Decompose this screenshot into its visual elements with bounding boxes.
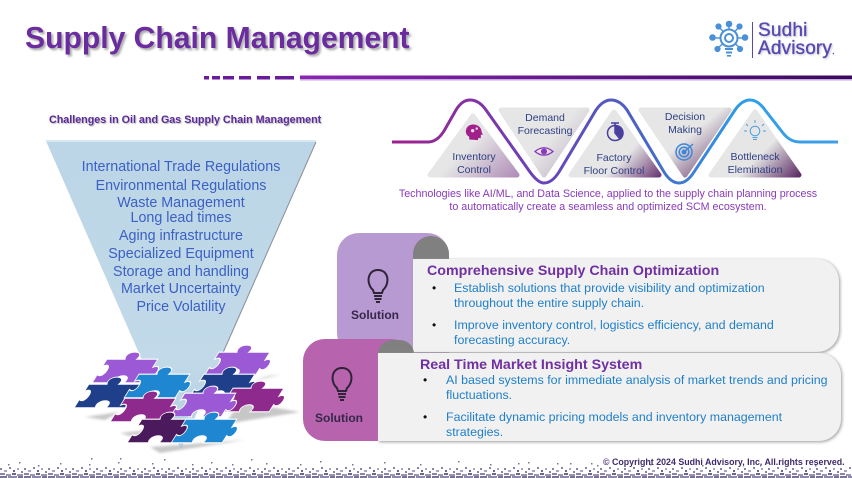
tab fold	[378, 340, 414, 354]
logo wordmark: Advisory.	[758, 38, 835, 59]
technologies description: Technologies like AI/ML, and Data Science, applied to the supply chain planning process	[399, 188, 817, 200]
logo wordmark: Sudhi	[758, 20, 808, 41]
triangle: decision making	[641, 110, 729, 175]
technologies description: to automatically create a seamless and optimized SCM ecosystem.	[449, 201, 767, 213]
wave line	[392, 100, 838, 183]
bullet list: •	[423, 373, 427, 387]
solution tab	[337, 233, 449, 355]
panel: real time market insight system	[303, 339, 844, 444]
triangle: demand forecasting	[501, 110, 587, 175]
funnel list of challenges: Price Volatility	[136, 299, 226, 315]
panel heading: Comprehensive Supply Chain Optimization	[427, 263, 719, 279]
icon: target	[676, 144, 693, 160]
icon: stopwatch	[608, 123, 623, 140]
funnel list of challenges: Specialized Equipment	[108, 246, 254, 262]
logo	[709, 20, 835, 60]
label: demand forecasting: Demand	[525, 112, 565, 124]
header divider	[204, 76, 852, 80]
label: inventory control: Inventory	[452, 151, 496, 163]
title: Supply Chain Management	[25, 22, 410, 55]
icon: eye	[535, 148, 553, 155]
technologies description	[399, 188, 817, 213]
bullet list	[432, 281, 774, 347]
funnel list of challenges: Aging infrastructure	[119, 228, 243, 244]
label: bottleneck elimination: Bottleneck	[730, 151, 780, 163]
bullet list	[423, 373, 828, 439]
label: decision making: Decision	[665, 111, 705, 123]
bullet list: Establish solutions that provide visibility and optimization	[454, 281, 765, 295]
triangle: factory floor control	[571, 112, 659, 175]
bullet list: •	[432, 318, 436, 332]
bullet list: •	[432, 281, 436, 295]
bullet list: forecasting accuracy.	[454, 333, 570, 347]
funnel list of challenges: International Trade Regulations	[82, 159, 280, 175]
label: inventory control	[452, 151, 496, 176]
solution tab	[303, 339, 413, 441]
label: factory floor control	[584, 152, 644, 176]
icon: network light bulb	[709, 20, 748, 57]
funnel list of challenges: Storage and handling	[113, 264, 249, 280]
panel: comprehensive supply chain optimization	[337, 233, 842, 354]
content card	[413, 259, 839, 352]
funnel list of challenges: Long lead times	[131, 210, 231, 226]
tab fold	[413, 236, 449, 259]
icon: bulb	[332, 367, 352, 401]
label: inventory control: Control	[457, 164, 491, 176]
icon: light bulb	[744, 120, 766, 140]
label: decision making: Making	[668, 124, 702, 136]
logo wordmark	[752, 22, 841, 58]
bullet list: •	[423, 410, 427, 424]
triangle: bottleneck elimination	[711, 112, 799, 175]
label: decision making	[665, 111, 705, 136]
solution label: Solution	[315, 411, 363, 425]
triangle: inventory control	[430, 116, 517, 175]
icon: head with gears	[466, 125, 483, 140]
label: demand forecasting	[518, 112, 572, 136]
content card	[378, 353, 841, 441]
bullet list: AI based systems for immediate analysis of market trends and pricing	[446, 373, 828, 387]
bullet list: throughout the entire supply chain.	[454, 296, 644, 310]
label: factory floor control: Factory	[596, 152, 632, 164]
label: bottleneck elimination	[728, 151, 782, 176]
bullet list: Facilitate dynamic pricing models and inventory management	[446, 410, 782, 424]
label: bottleneck elimination: Elemination	[728, 164, 782, 176]
bullet list: Improve inventory control, logistics efficiency, and demand	[454, 318, 774, 332]
heading: challenges: Challenges in Oil and Gas Supply Chain Management	[49, 114, 321, 126]
funnel list of challenges: Environmental Regulations	[96, 178, 266, 194]
funnel list of challenges: Market Uncertainty	[121, 281, 241, 297]
funnel list of challenges: Waste Management	[117, 195, 245, 211]
copyright: © Copyright 2024 Sudhi Advisory, Inc. All.rights reserved.	[603, 457, 845, 467]
label: demand forecasting: Forecasting	[518, 124, 572, 136]
funnel list of challenges	[82, 159, 280, 315]
solution label: Solution	[351, 308, 399, 322]
icon: bulb	[368, 269, 388, 303]
panel heading: Real Time Market Insight System	[420, 357, 642, 373]
bullet list: fluctuations.	[446, 388, 512, 402]
label: factory floor control: Floor Control	[584, 164, 644, 176]
bullet list: strategies.	[446, 425, 503, 439]
